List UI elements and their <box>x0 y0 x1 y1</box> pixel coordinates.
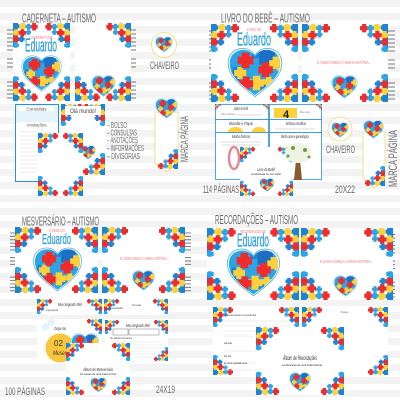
month tag: 4 <box>283 109 290 121</box>
page: album cover: Álbum de Recordações <box>282 355 317 362</box>
panel: livro do bebe <box>203 10 400 196</box>
page: album cover: 12 meses de uma vida incrível <box>80 372 116 376</box>
pink oval <box>229 147 239 169</box>
page: top left: Meu Segundo Mês <box>58 302 82 307</box>
title: livro do bebe: LIVRO DO BEBÊ – AUTISMO <box>221 10 310 26</box>
inner pages <box>212 306 389 396</box>
page: month four <box>270 104 322 121</box>
page: notes left: Atenção <box>224 341 232 345</box>
page: notes right: Data <box>341 310 348 314</box>
cover page: Eduardo <box>237 30 271 50</box>
page: consultas: Anotações <box>26 122 47 128</box>
page: top right: Os meses <box>132 303 141 307</box>
heart <box>131 270 155 291</box>
bookmark <box>154 98 179 172</box>
panel: recordacoes <box>206 212 395 396</box>
page: top right <box>103 299 169 315</box>
page: month record: Meu Segundo Mês <box>126 323 150 328</box>
feature list: – INFORMAÇÕES <box>107 143 144 153</box>
page: month photo: Chegou mais <box>54 326 66 331</box>
spiral rings: caderneta <box>7 30 136 98</box>
page: album cover <box>65 343 131 395</box>
cover label: RECORDAÇÕES DE <box>240 228 266 234</box>
page count: 114 PÁGINAS <box>203 183 239 196</box>
spiral rings: livro <box>209 31 395 99</box>
page: album cover: Álbum de Mesversário <box>82 366 113 372</box>
cover page <box>210 23 299 103</box>
page: dados <box>215 104 269 120</box>
inner pages <box>16 103 106 196</box>
page: notes left: Do dia <box>224 354 231 358</box>
page: dados: Dados do bebê <box>234 106 248 111</box>
size: 20X22 <box>335 184 355 196</box>
page: pocket divider <box>37 132 84 196</box>
heart <box>333 275 358 297</box>
page: consultas: Consultas <box>26 106 47 112</box>
bookmark label: MARCA PÁGINA <box>178 116 191 162</box>
page count: 100 PÁGINAS <box>5 385 45 398</box>
back page <box>74 22 132 102</box>
page: consultas <box>16 104 58 182</box>
bookmark label: MARCA PÁGINA <box>385 130 400 187</box>
opening page <box>300 227 394 301</box>
bookmark <box>363 120 386 188</box>
page: notes left: Eu tenho guardado aqui <box>224 361 247 365</box>
page: mamae e papai: Mamãe e Papai <box>229 121 254 126</box>
panel: mesversario <box>5 214 191 398</box>
month badge: 02 <box>54 339 63 348</box>
panel: recordacoes: RECORDAÇÕES – AUTISMO <box>215 212 298 227</box>
cover page <box>206 227 300 301</box>
page: month four: Meu mês <box>300 110 310 114</box>
family tree <box>285 143 311 180</box>
opening page <box>301 23 389 103</box>
inner pages <box>36 299 169 395</box>
feature list: – BOLSO <box>107 120 127 130</box>
feature list: – DIVISÓRIAS <box>107 151 140 161</box>
page: top left: O que aprendi <box>46 308 58 312</box>
title: caderneta: CADERNETA – AUTISMO <box>22 12 96 26</box>
page: month photo <box>37 319 103 362</box>
page: ola mundo: Olá mundo! <box>70 109 96 115</box>
opening line: E ASSIM COMEÇA A MINHA HISTÓRIA... <box>317 59 371 65</box>
page: historia: Minha história <box>232 134 250 139</box>
feature list: – ANOTAÇÕES <box>107 135 138 145</box>
page: album cover: Lembranças de uma linda história <box>282 363 322 367</box>
keychain <box>152 32 176 58</box>
heart <box>32 248 83 291</box>
page: minhas escolhas: Minhas escolhas <box>286 121 306 126</box>
name: Eduardo <box>42 231 71 248</box>
heart <box>225 249 281 296</box>
page: dados: Nome completo <box>221 112 235 116</box>
panel: caderneta <box>7 12 191 196</box>
heart <box>226 48 283 97</box>
panel: mesversario: MESVERSÁRIO – AUTISMO <box>22 214 99 228</box>
feature list: – CONSULTAS <box>107 128 137 138</box>
month badge: Meses <box>53 351 67 357</box>
page: album cover <box>239 147 294 196</box>
cover label: LIVRO DE <box>247 27 261 32</box>
month badge <box>46 334 74 362</box>
opening page <box>101 226 186 294</box>
cover page <box>14 226 99 294</box>
keychain label: CHAVEIRO <box>326 144 355 156</box>
opening line: E ASSIM COMEÇA A MINHA HISTÓRIA... <box>120 255 169 261</box>
inner pages <box>215 104 322 196</box>
page: notes left <box>212 306 300 376</box>
cover page: Eduardo <box>25 36 57 56</box>
page: top left <box>36 299 103 315</box>
page: month record: Os melhores momentos <box>110 336 132 340</box>
page: album cover <box>255 326 345 396</box>
page: notes left: O que aconteceu no mundo dia <box>224 313 256 317</box>
feature list <box>107 120 144 161</box>
cover label: 12 MESES DO <box>49 228 65 233</box>
keychain label: CHAVEIRO <box>150 60 179 72</box>
keychain <box>328 117 352 141</box>
page: month record <box>105 320 168 361</box>
heart <box>91 75 116 97</box>
heart <box>331 76 358 98</box>
page: notes right <box>301 306 389 376</box>
spiral rings: mesversario <box>10 233 191 291</box>
page: album cover: Livro do Bebê <box>257 167 275 172</box>
cover page: Eduardo <box>237 230 269 250</box>
spiral rings: recordacoes <box>207 234 395 297</box>
size: 24X19 <box>156 384 175 396</box>
page: top right: Comemorações <box>110 306 123 310</box>
cover label: CADERNETA DE <box>30 35 52 40</box>
page: tree: Minha árvore genealógica <box>281 134 309 139</box>
heart <box>20 56 62 91</box>
cover page <box>12 22 71 102</box>
page: album cover: Lembranças do meu bebê <box>251 172 281 176</box>
